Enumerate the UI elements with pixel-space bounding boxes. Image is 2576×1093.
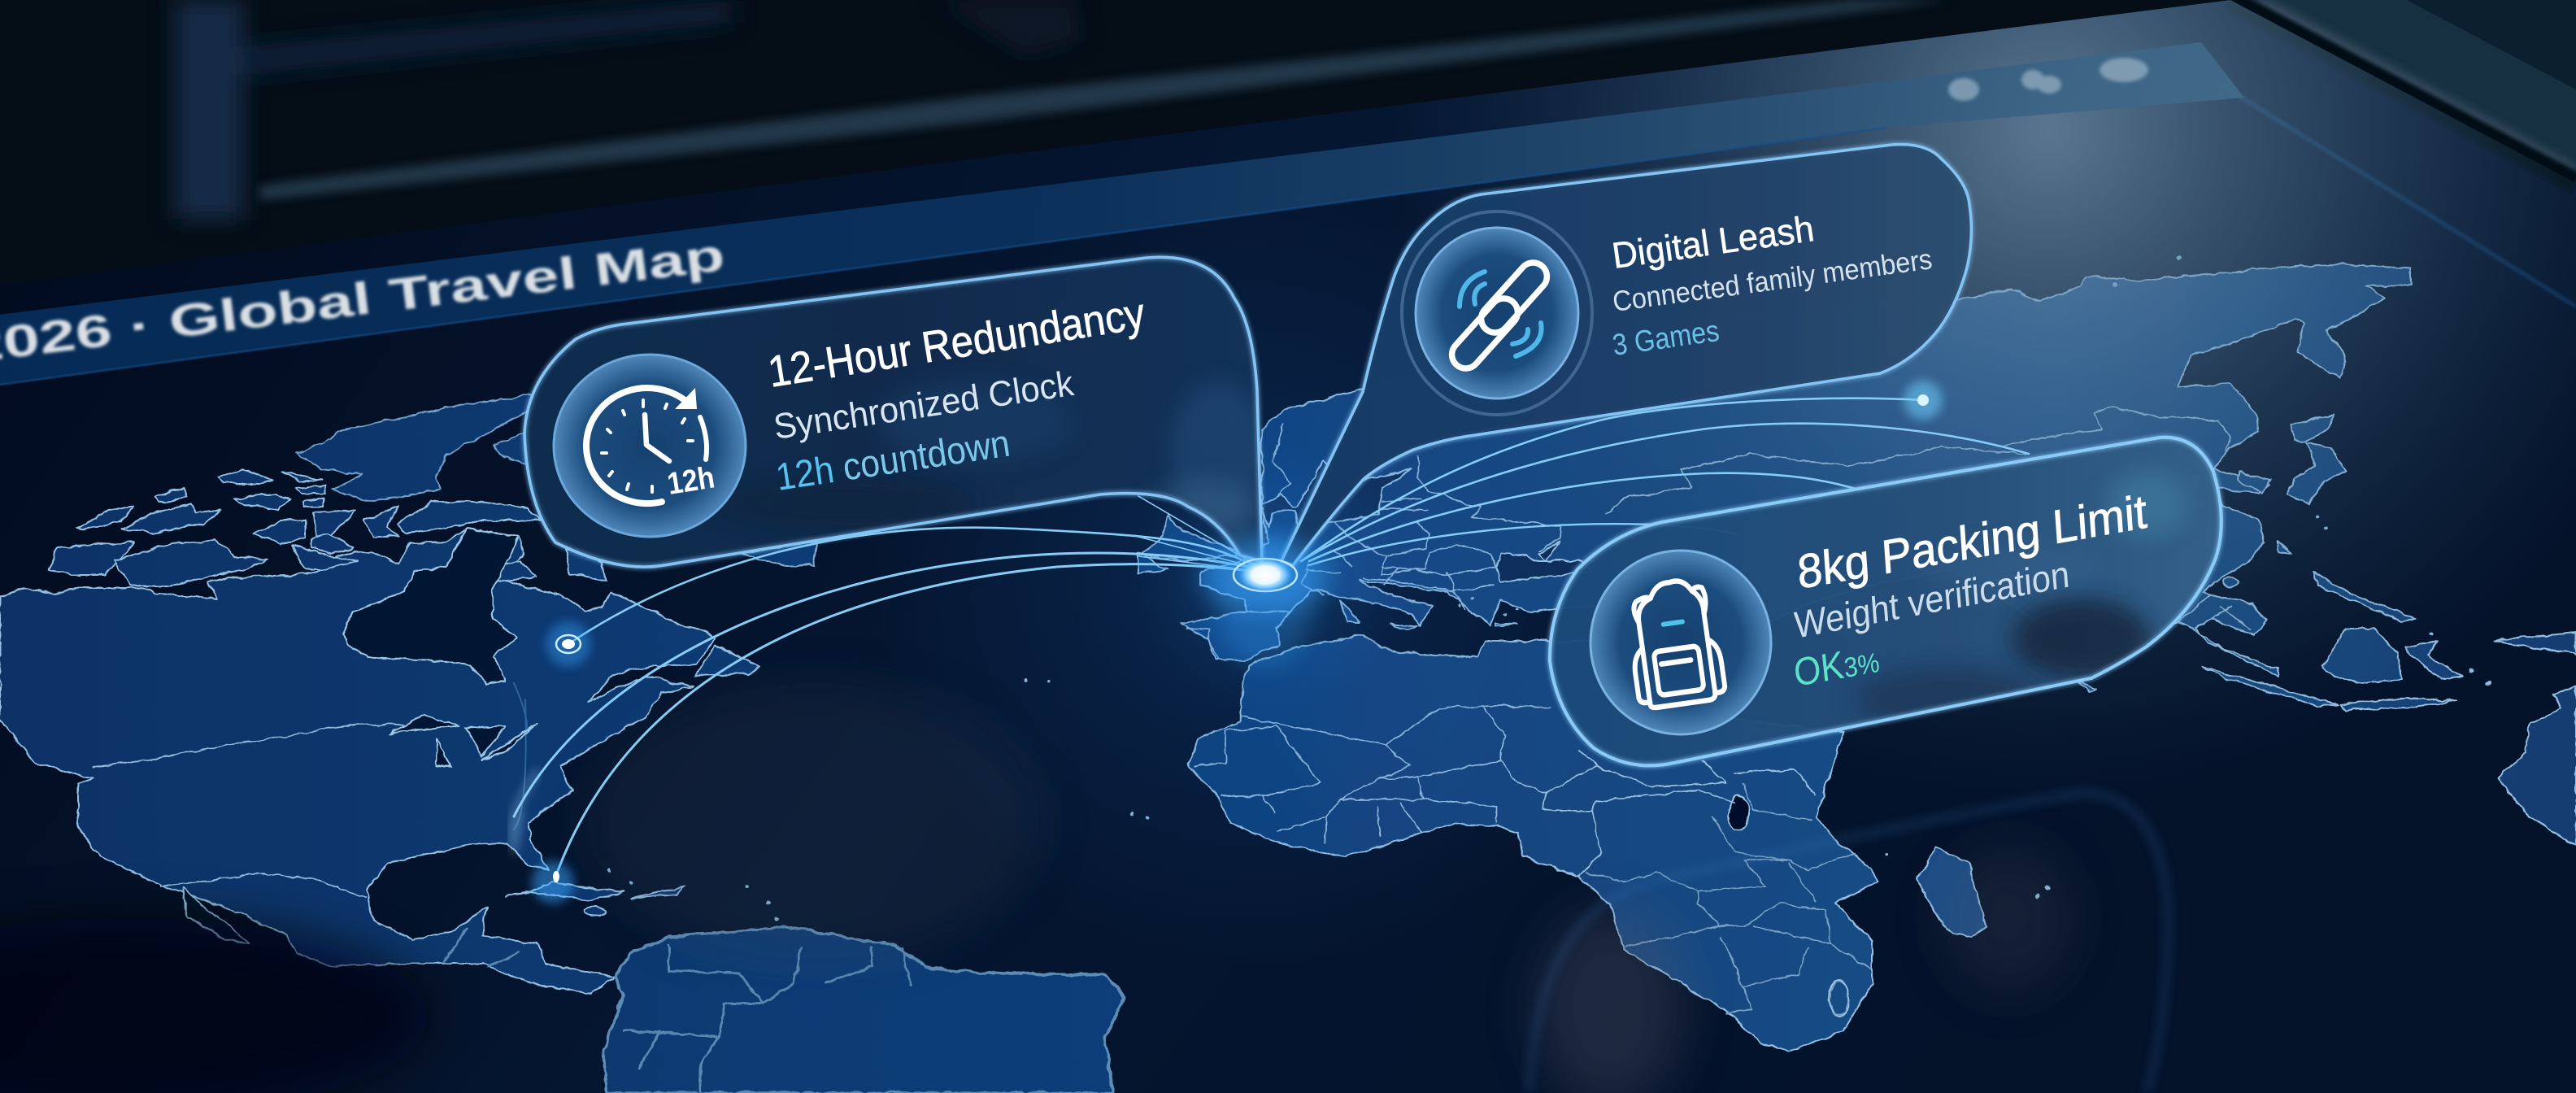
card text: 3 Games: [1610, 314, 1721, 362]
route: Canada: [568, 528, 1259, 644]
callout: 12-Hour Redundancy: [524, 257, 1268, 567]
card text: 12-Hour Redundancy: [764, 289, 1148, 397]
icon: chain link: [1402, 211, 1592, 415]
central hub: Europe origin: [1200, 537, 1330, 667]
short spokes west: [1138, 496, 1256, 571]
card text: [1792, 485, 2148, 695]
route: east 1: [1301, 424, 2029, 561]
inland seas: [342, 460, 1849, 1017]
card text: [764, 289, 1148, 499]
callout: 8kg Packing Limit: [1550, 438, 2221, 765]
icon: clock: [554, 355, 746, 537]
icon: backpack: [1590, 551, 1771, 734]
header bar: [0, 42, 2244, 385]
card text: Weight verification: [1793, 552, 2071, 647]
card text: OK3%: [1792, 638, 1882, 695]
card text: Synchronized Clock: [771, 364, 1077, 447]
flight routes: [512, 398, 2029, 875]
node: Caribbean: [532, 861, 574, 904]
route: east 2: [1309, 473, 1858, 561]
card text: Connected family members: [1611, 243, 1934, 318]
card text: [1609, 207, 1934, 362]
route: east 3: [1309, 524, 1740, 565]
small islands: [608, 256, 2491, 921]
faint ground tracks: [512, 773, 537, 850]
toolbar icons: [1948, 58, 2148, 101]
route: Caribbean: [556, 564, 1259, 875]
landmasses: [0, 264, 2576, 1093]
node: Asia: [1904, 381, 1943, 420]
callout: Digital Leash: [1281, 145, 1971, 565]
card text: 8kg Packing Limit: [1795, 485, 2148, 599]
node: Canada: [546, 621, 591, 667]
route: Florida: [514, 553, 1259, 816]
route: Asia dot: [1301, 398, 1923, 561]
icon: clock: 12h: [665, 460, 717, 502]
world map: [0, 256, 2576, 1093]
card text: Digital Leash: [1609, 207, 1817, 277]
card text: 12h countdown: [773, 421, 1012, 499]
country borders: [92, 407, 2251, 1093]
